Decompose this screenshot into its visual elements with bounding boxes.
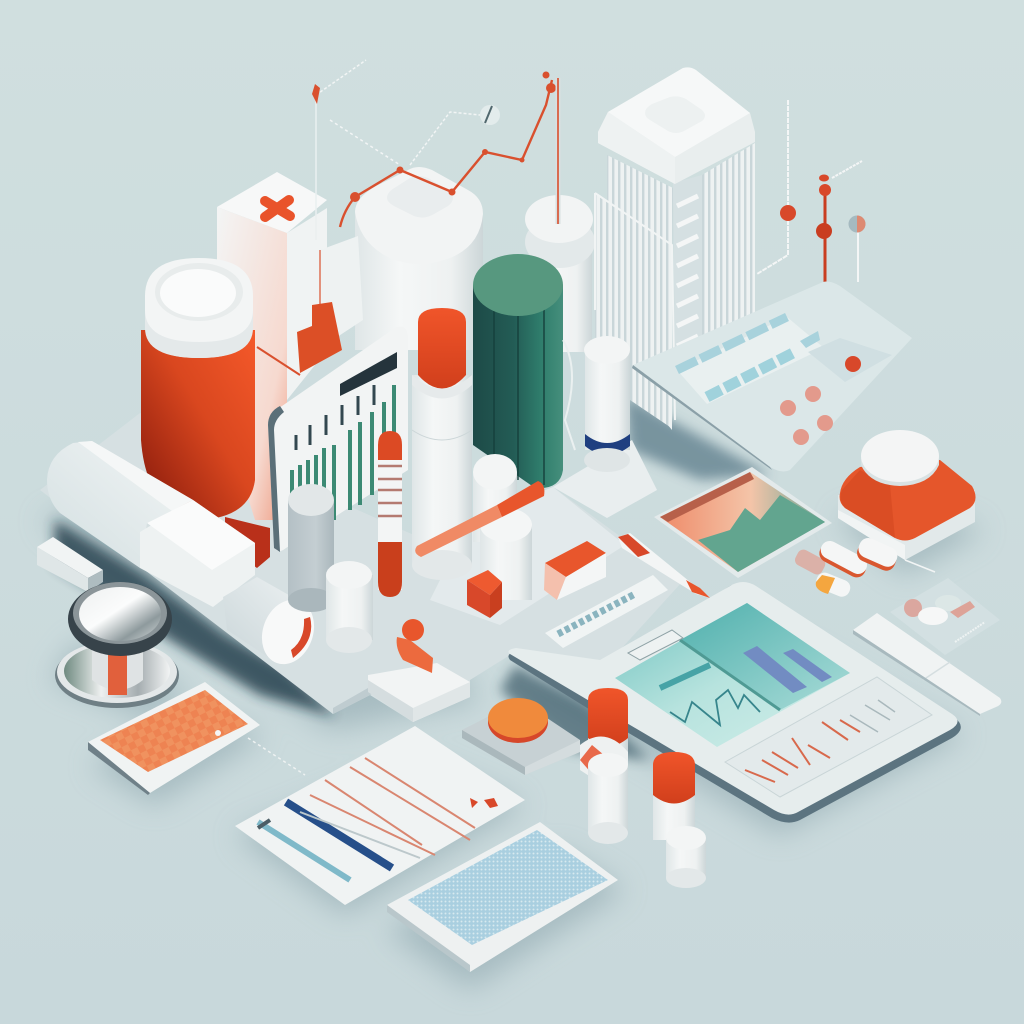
panel: central platform bbox=[40, 413, 682, 722]
small red cubes bbox=[467, 541, 606, 618]
green ribbed cylinder bbox=[473, 254, 563, 488]
small white block bbox=[37, 537, 103, 592]
red dispenser device bbox=[838, 430, 976, 560]
right side pin markers bbox=[757, 100, 866, 315]
pen bbox=[618, 533, 710, 598]
panel: clipboard tablet bbox=[508, 582, 961, 823]
white container with square cap bbox=[355, 167, 483, 350]
white tower with medical cross bbox=[217, 90, 327, 520]
pills group bbox=[793, 535, 935, 599]
white sheet under capsule bbox=[553, 440, 657, 518]
small white capsule with blue band bbox=[563, 336, 630, 472]
orange button bbox=[462, 698, 580, 775]
line chart with red polyline bbox=[312, 60, 500, 165]
test tube with stripes bbox=[378, 431, 402, 597]
chart card bbox=[654, 467, 832, 578]
blister pack bbox=[890, 578, 1000, 655]
red trend line bbox=[340, 72, 556, 227]
small white bottles bbox=[288, 484, 373, 653]
orange grid sheet bbox=[88, 682, 305, 795]
white red-capped tube bbox=[412, 308, 472, 580]
icon: red cross bbox=[265, 200, 290, 217]
clipboard screen with line chart bbox=[615, 603, 850, 747]
textured card bbox=[387, 822, 618, 972]
large horizontal white bottle bbox=[47, 441, 323, 672]
ground shadows bbox=[40, 395, 985, 990]
skyscraper building bbox=[595, 67, 755, 430]
panel: data table tablet bbox=[632, 282, 912, 471]
white cylinders and syringe bbox=[415, 454, 544, 600]
big red bottle bbox=[141, 258, 255, 520]
stethoscope head bbox=[55, 582, 179, 708]
small tall round post bbox=[525, 78, 595, 352]
green bars chart tablet bbox=[268, 326, 408, 552]
lower chart panel bbox=[725, 677, 932, 797]
document page bbox=[235, 726, 525, 905]
clipped document and red bar bbox=[257, 236, 363, 375]
red button pedestal bbox=[368, 619, 470, 722]
red-capped vials bbox=[580, 688, 706, 888]
white strip bbox=[853, 613, 1001, 716]
label plate bbox=[545, 575, 668, 648]
